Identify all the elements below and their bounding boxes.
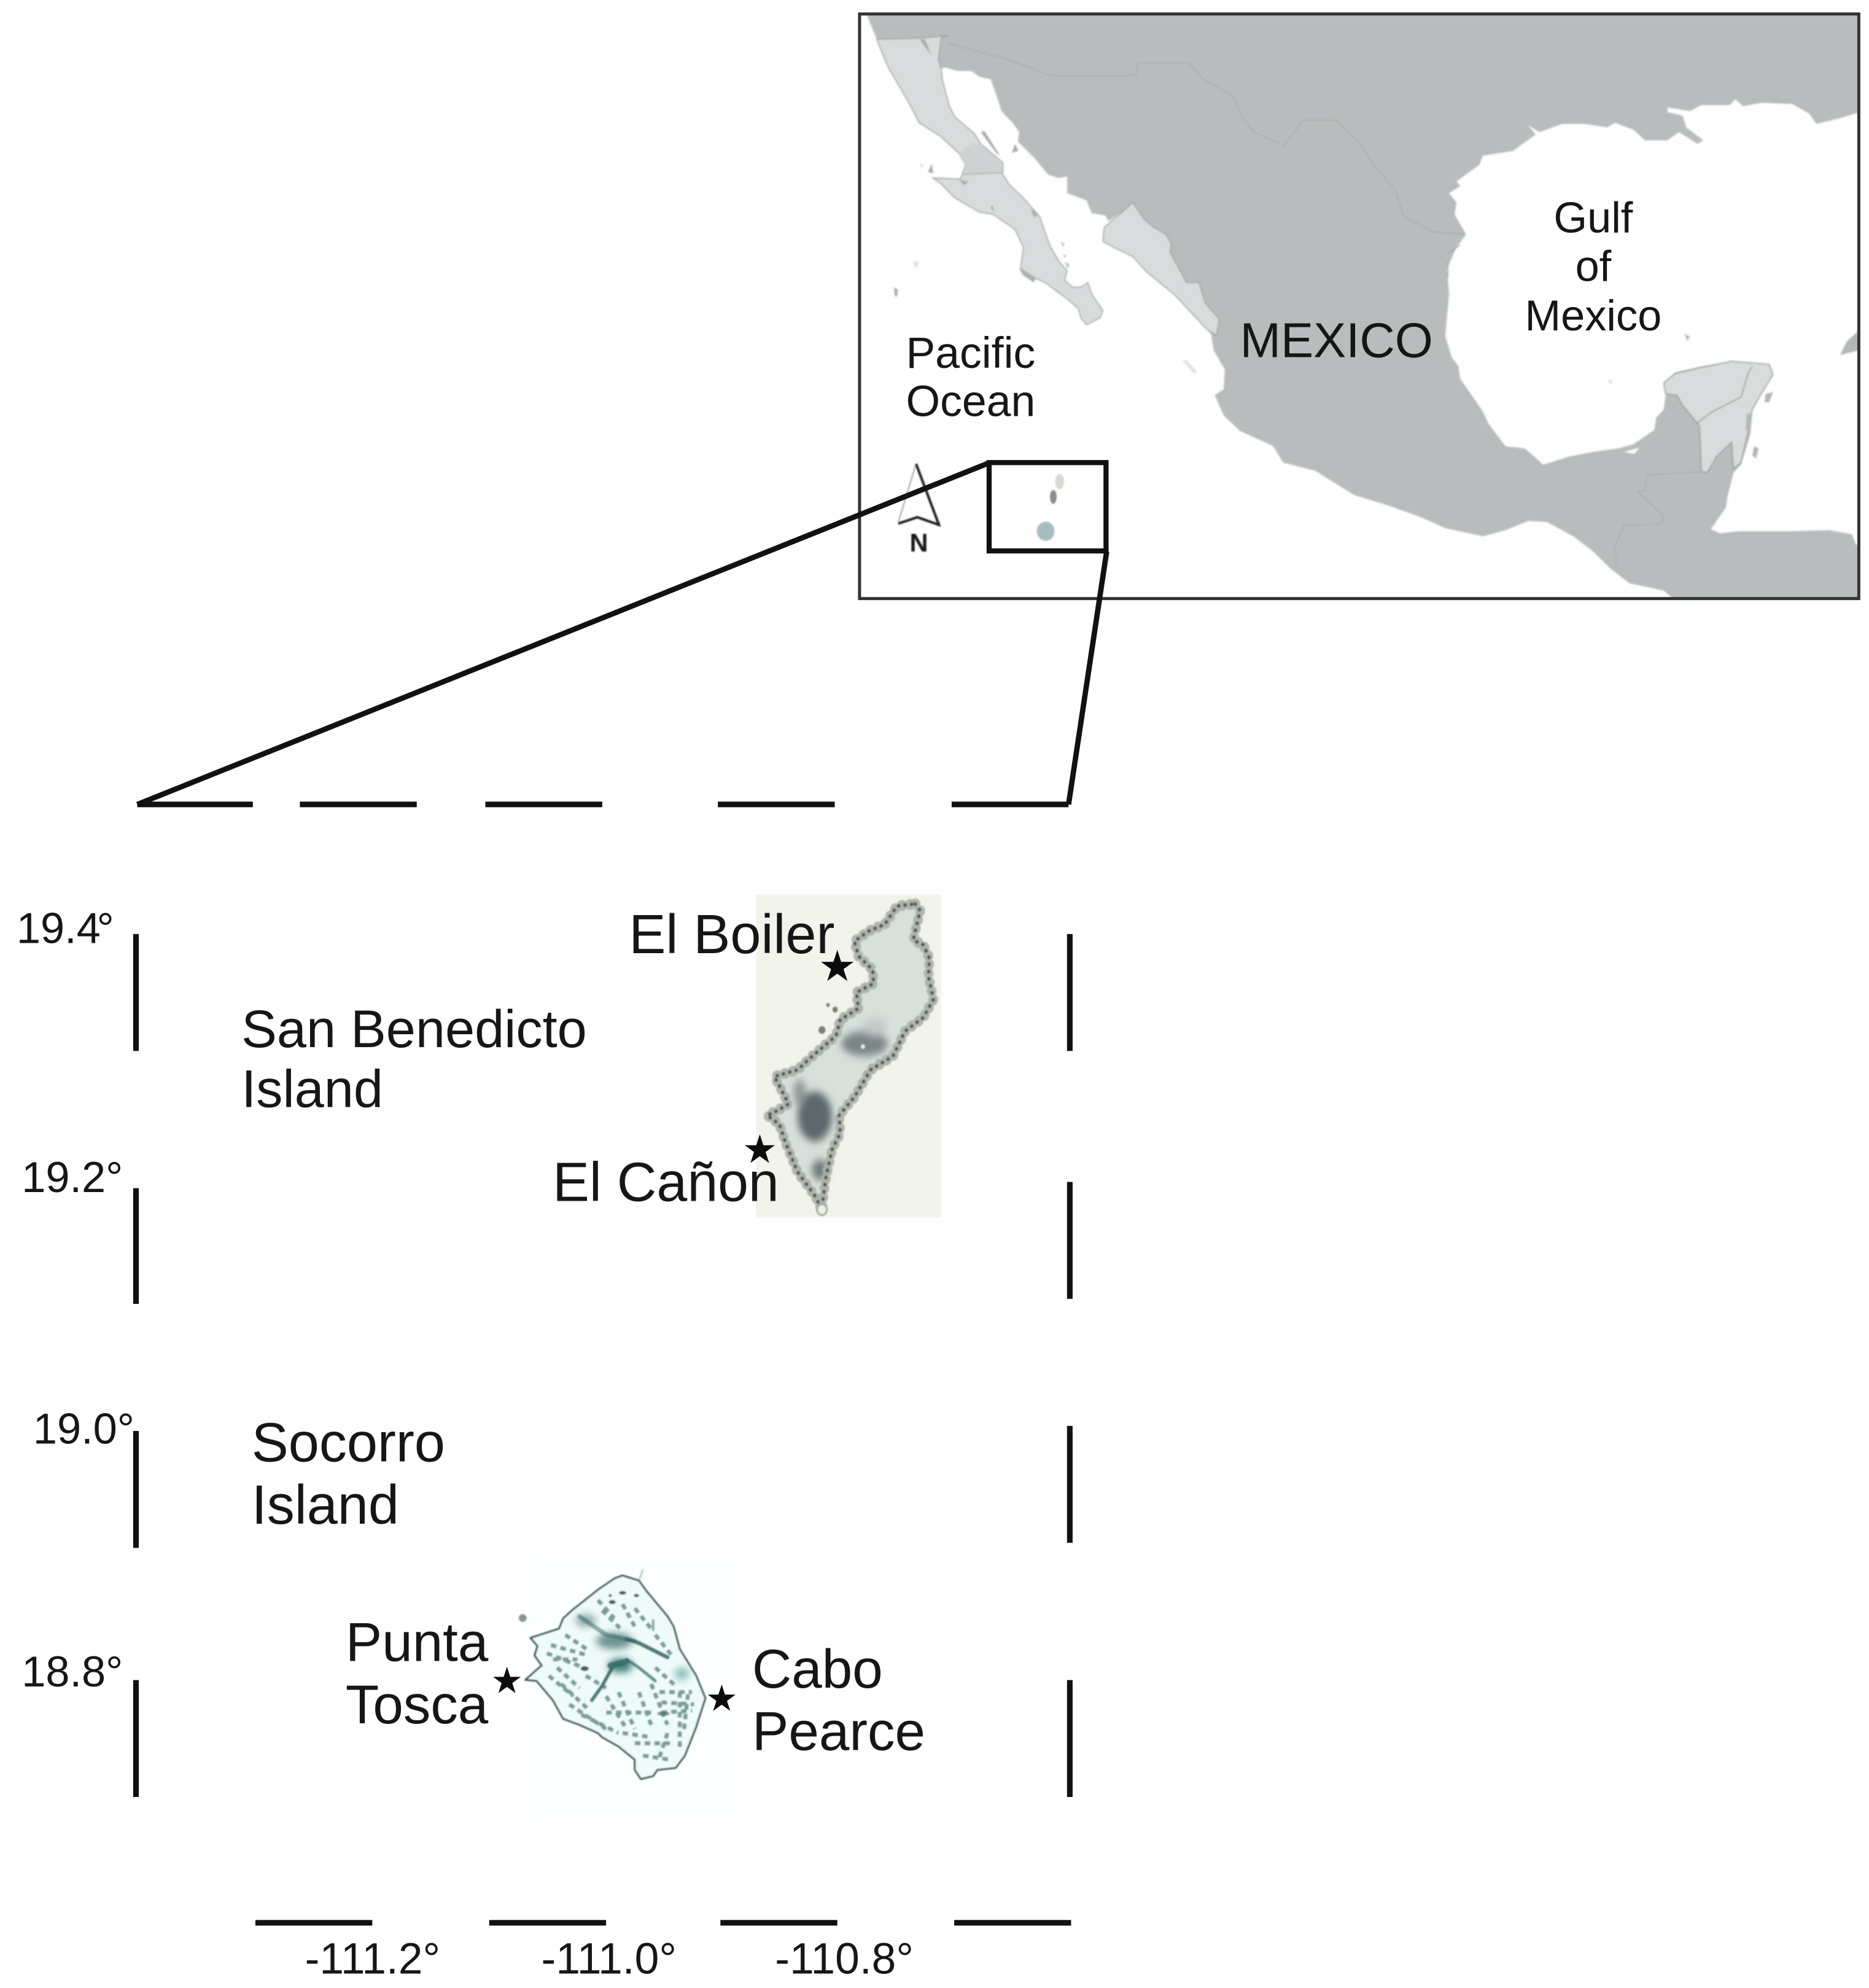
Baja California peninsula <box>877 36 1103 325</box>
longitude labels: -111.2° <box>305 1935 440 1984</box>
offshore rock <box>519 1614 527 1622</box>
star: Punta Tosca <box>493 1667 521 1693</box>
label: Cabo Pearce <box>752 1638 925 1761</box>
map frame <box>860 14 1859 599</box>
star: El Boiler <box>821 950 853 981</box>
latitude labels: 19.2° <box>21 1153 123 1201</box>
label: Socorro Island: Socorro <box>252 1413 445 1474</box>
longitude labels <box>305 1935 914 1984</box>
coastline dots <box>767 904 933 1210</box>
label: San Benedicto Island: Island <box>241 1059 383 1118</box>
island body <box>767 904 933 1210</box>
label: El Boiler: El Boiler <box>629 904 834 965</box>
Gulf of California islands and lagoons <box>894 39 1038 297</box>
label: Socorro Island: Island <box>252 1475 399 1536</box>
terrain speckle <box>547 1600 694 1760</box>
label: Punta Tosca: Punta <box>346 1612 489 1673</box>
panel: location map of Mexico <box>860 12 1869 604</box>
central ridges <box>580 1616 667 1701</box>
island map: Socorro <box>519 1559 750 1817</box>
label: MEXICO: MEXICO <box>1240 313 1433 367</box>
label: Punta Tosca: Tosca <box>346 1674 489 1735</box>
latitude labels: 18.8° <box>21 1647 123 1696</box>
longitude labels: -110.8° <box>775 1935 914 1984</box>
land: Texas and northern Gulf coast <box>1281 15 1857 357</box>
Baja state section shading <box>960 145 1001 173</box>
Yucatan peninsula <box>1664 361 1773 473</box>
icon: north arrow <box>898 464 939 557</box>
latitude labels: 19.0° <box>33 1405 134 1453</box>
label: Socorro Island <box>252 1413 445 1536</box>
label: Gulf of Mexico: of <box>1576 241 1612 290</box>
label: Cabo Pearce: Cabo <box>752 1638 883 1699</box>
label: Pacific Ocean <box>906 329 1035 426</box>
northern crater dots <box>581 1591 669 1716</box>
Campeche lagoon <box>1624 448 1639 454</box>
label: Gulf of Mexico: Mexico <box>1525 291 1661 340</box>
star: El Canon <box>745 1134 775 1163</box>
northern stalk <box>639 1569 643 1580</box>
label: San Benedicto Island <box>241 1000 587 1118</box>
markers: sampling sites <box>493 950 853 1711</box>
southern tip islet <box>817 1204 827 1215</box>
inset: tiny islands in locator box <box>1037 474 1064 540</box>
label: Punta Tosca <box>346 1612 489 1735</box>
land: northwest Mexico and Baja California <box>866 12 1297 393</box>
Sinaloa coastal strip <box>1103 203 1219 335</box>
US-Mexico border east <box>1283 120 1464 235</box>
locator box <box>989 462 1106 551</box>
star: Cabo Pearce <box>708 1685 736 1711</box>
island map: San Benedicto <box>756 895 941 1217</box>
label: San Benedicto Island: San Benedicto <box>241 1000 587 1059</box>
Yucatan state lines <box>1698 367 1752 423</box>
island body and coastline <box>526 1575 705 1779</box>
label: Pacific Ocean: Ocean <box>906 377 1035 426</box>
Central American borders <box>1615 475 1664 548</box>
lagoon strip <box>1447 245 1460 278</box>
land: southern Mexico and Central America <box>1214 330 1857 597</box>
latitude labels <box>17 903 134 1696</box>
central dark shading <box>575 1615 689 1680</box>
label: Cabo Pearce: Pearce <box>752 1700 925 1761</box>
icon: north arrow: N <box>910 529 928 557</box>
volcanic relief shading <box>793 1018 888 1180</box>
coastline beads <box>767 904 933 1210</box>
Cuba and small islands <box>1684 330 1860 459</box>
US-Mexico border west <box>971 49 1278 143</box>
crater highlight <box>861 1044 865 1049</box>
offshore islets <box>818 1003 837 1034</box>
land masses <box>866 12 1869 604</box>
label: Pacific Ocean: Pacific <box>906 329 1035 378</box>
latitude labels: 19.4° <box>17 903 114 952</box>
label: Gulf of Mexico: Gulf <box>1553 193 1633 242</box>
zoom connector lines <box>138 462 1106 805</box>
label: Gulf of Mexico <box>1525 193 1661 340</box>
longitude labels: -111.0° <box>542 1935 677 1984</box>
label: El Cañon: El Cañon <box>553 1151 779 1212</box>
inset frame: dashed border <box>136 805 1071 1923</box>
